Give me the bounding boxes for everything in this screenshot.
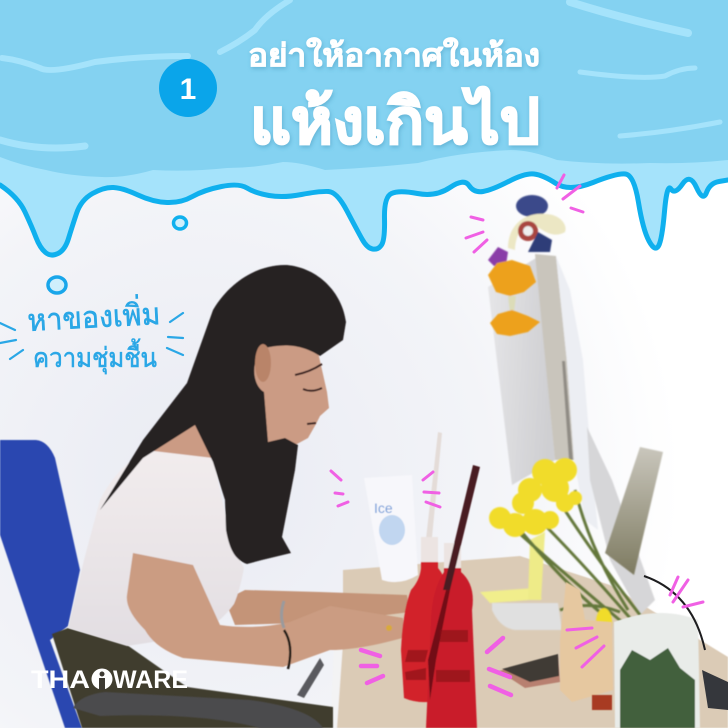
near arm and hand xyxy=(127,553,406,667)
drip outline xyxy=(0,174,728,255)
title xyxy=(248,37,540,157)
header sky band with dripping paint xyxy=(0,0,728,255)
photo background wall xyxy=(0,150,728,728)
hair xyxy=(100,265,346,564)
plastic cup with Ice label xyxy=(364,432,442,582)
eye, brow and lips xyxy=(295,364,322,424)
armrest xyxy=(73,658,324,728)
Thaiware logo: WARE xyxy=(113,666,188,694)
pink accent marks xyxy=(331,175,703,695)
t-shirt xyxy=(68,450,244,646)
back arm and hand xyxy=(225,590,410,625)
ring xyxy=(386,625,392,631)
chair back xyxy=(0,440,82,728)
lighter xyxy=(592,695,612,710)
desk xyxy=(330,556,728,728)
handwritten caption: ความชุ่มชื้น xyxy=(33,338,157,375)
skin: neck, chest, face xyxy=(143,322,329,470)
wooden pen box xyxy=(560,582,613,702)
number badge: 1 xyxy=(180,73,196,106)
Thaiware logo: THA xyxy=(31,666,90,694)
bracelets xyxy=(282,601,290,669)
yellow flowers xyxy=(489,458,640,636)
ruler xyxy=(605,447,663,575)
brush strokes xyxy=(0,0,720,148)
Thaiware logo xyxy=(31,666,188,694)
monitor xyxy=(480,254,655,630)
figurine and garland xyxy=(488,195,566,336)
cable and mouse xyxy=(644,576,728,710)
trousers xyxy=(52,628,333,728)
handwritten caption: หาของเพิ่ม xyxy=(26,293,161,338)
title: อย่าให้อากาศในห้อง xyxy=(248,37,540,73)
number badge xyxy=(159,59,217,117)
small drop xyxy=(174,217,186,229)
phone xyxy=(499,654,560,688)
woman xyxy=(68,265,410,669)
glass jar with leaves xyxy=(614,613,700,728)
title: แห้งเกินไป xyxy=(250,86,540,157)
handwritten caption xyxy=(0,277,183,375)
ear xyxy=(255,344,271,382)
red bottles xyxy=(401,465,480,728)
plastic cup with Ice label: Ice xyxy=(374,500,393,516)
